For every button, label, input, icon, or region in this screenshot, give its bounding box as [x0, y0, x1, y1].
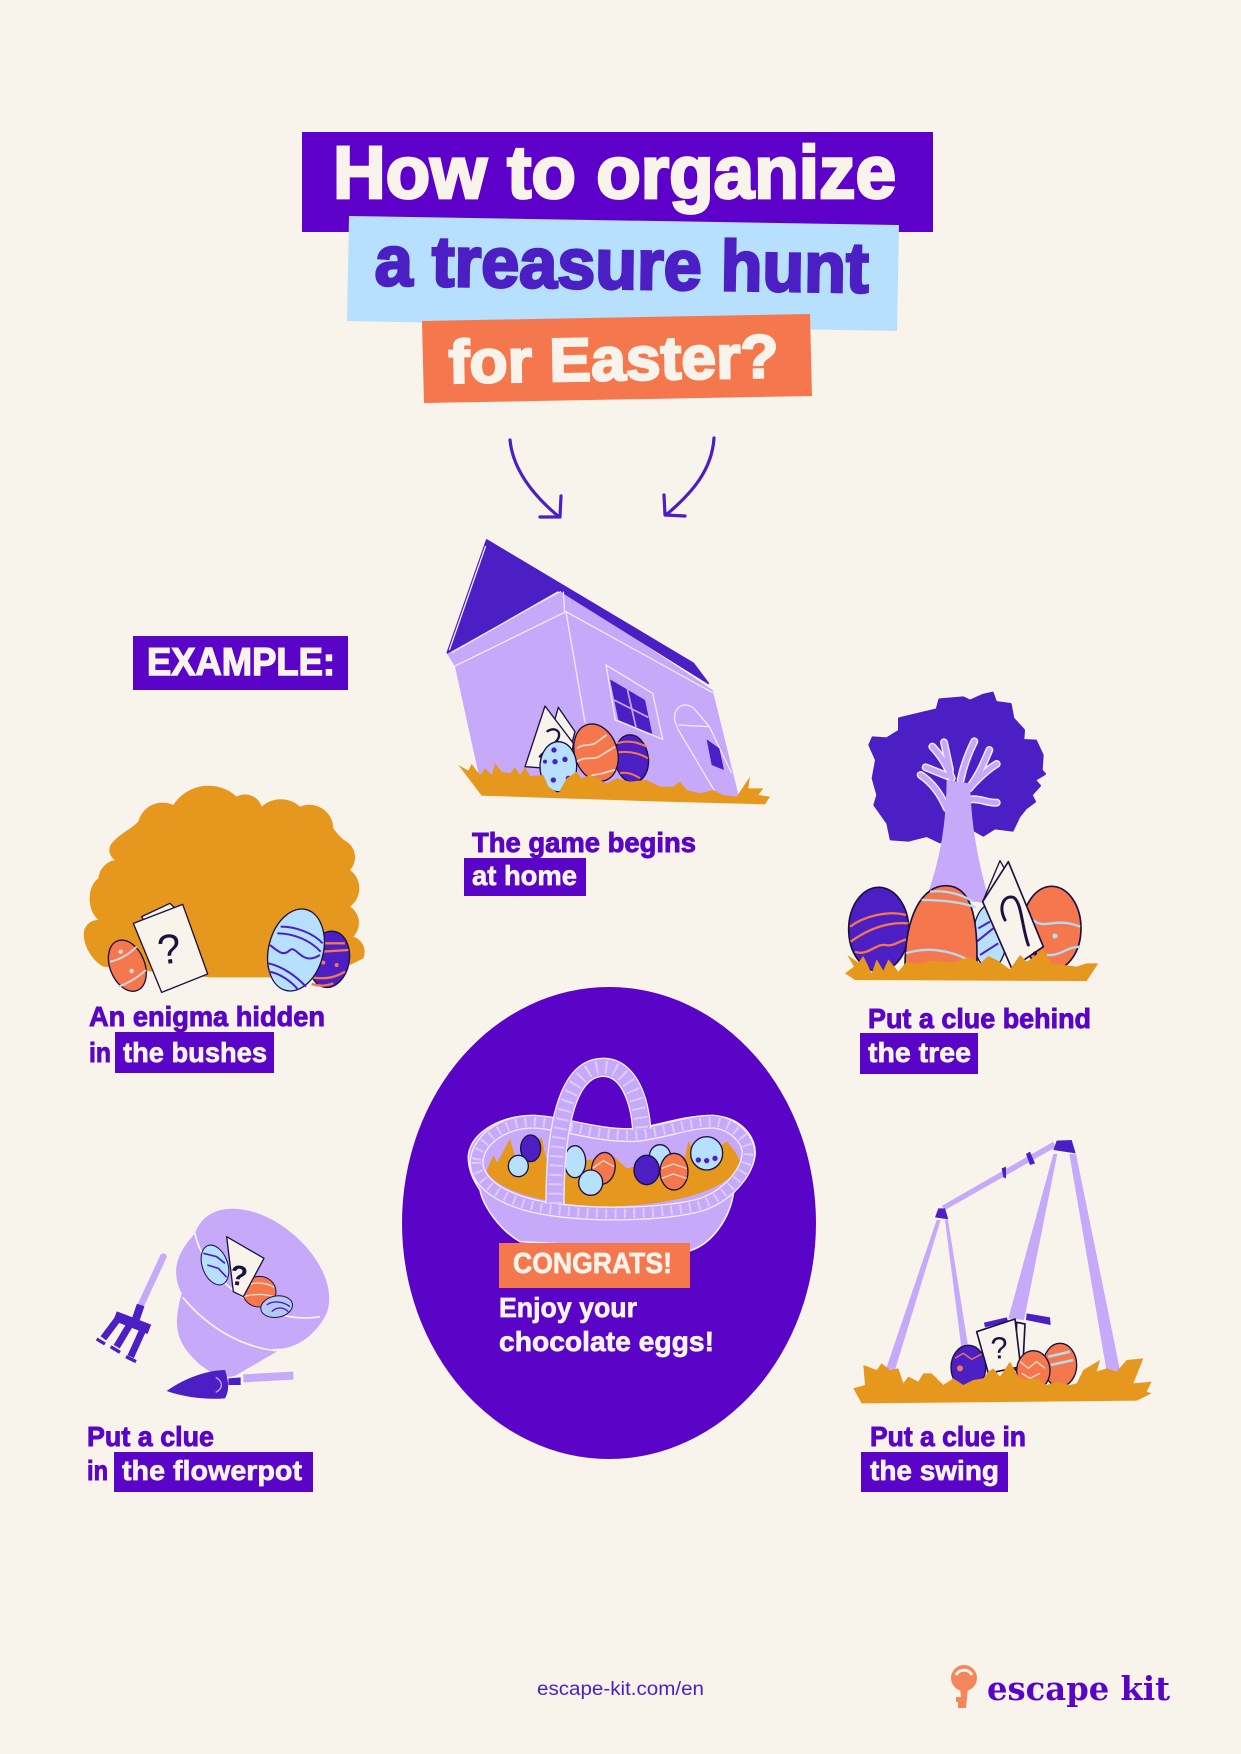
label: put a clue in the flowerpot: in [87, 1455, 108, 1486]
clue card [525, 706, 575, 770]
panel: home [447, 540, 770, 896]
pot rim [176, 1209, 329, 1349]
title line 2 banner [347, 216, 899, 331]
congrats message: Enjoy your [499, 1292, 637, 1323]
logo: escape kit [951, 1665, 1171, 1708]
egg: purple [612, 733, 652, 785]
label: put a clue behind the tree: Put a clue behind [868, 1003, 1091, 1034]
website url: escape-kit.com/en [537, 1679, 704, 1700]
house roof [447, 540, 708, 683]
illustration: basket [468, 1067, 755, 1251]
label: game begins at home [464, 827, 696, 896]
title line 1 text: How to organize [333, 131, 896, 214]
title line 1 banner [302, 132, 933, 232]
title line 3 banner [422, 314, 812, 403]
egg: left orange [101, 934, 153, 997]
egg: small blue [973, 905, 1007, 968]
egg: orange middle [905, 886, 977, 973]
basket interior grass [485, 1127, 744, 1207]
illustration: flowerpot and tools [97, 1209, 329, 1399]
illustration: bush with eggs and clue [84, 786, 365, 997]
congrats tag [499, 1243, 690, 1288]
congrats message [499, 1292, 714, 1357]
house wall lines [449, 546, 732, 792]
illustration: house [447, 540, 770, 804]
clue card [977, 1319, 1025, 1373]
label: an enigma hidden in the bushes [89, 1001, 325, 1073]
clue card: ? [990, 1331, 1009, 1366]
congrats message: chocolate eggs! [499, 1326, 714, 1357]
illustration: swing with eggs and clue [853, 1140, 1152, 1403]
label: an enigma hidden in the bushes: An enigma hidden [89, 1001, 325, 1032]
grass [458, 763, 770, 804]
icon: key [951, 1665, 977, 1708]
pot lines [183, 1233, 320, 1351]
panel: flowerpot [87, 1209, 329, 1492]
logo wordmark: escape kit [987, 1669, 1171, 1708]
basket rim rope [477, 1122, 748, 1214]
swing joints [935, 1140, 1076, 1327]
clue card: ? [154, 924, 184, 974]
label: put a clue behind the tree [860, 1003, 1091, 1074]
egg: purple [849, 887, 909, 971]
tree foliage [869, 693, 1045, 842]
bush [84, 786, 365, 977]
egg: orange right [1022, 886, 1081, 970]
label: put a clue in the flowerpot: Put a clue [87, 1421, 214, 1452]
house body [447, 591, 739, 798]
basket body [468, 1116, 755, 1251]
egg: orange back [1043, 1343, 1077, 1387]
title line 3 text: for Easter? [448, 322, 779, 396]
hand fork [97, 1257, 163, 1362]
grass [845, 949, 1098, 981]
eggs and clue in pot [196, 1237, 294, 1320]
swing frame [886, 1142, 1121, 1373]
panel: swing [853, 1140, 1152, 1492]
eggs in basket [508, 1135, 723, 1195]
example tag: EXAMPLE: [147, 641, 335, 684]
egg: orange [567, 718, 625, 787]
label: put a clue in the flowerpot [87, 1421, 313, 1492]
panel: congrats circle [402, 987, 816, 1459]
clue card [983, 861, 1043, 968]
egg: big blue [259, 903, 333, 997]
egg: purple [305, 928, 354, 991]
label: an enigma hidden in the bushes: the bushes [123, 1037, 267, 1068]
clue card [133, 903, 208, 992]
panel: tree [845, 693, 1098, 1074]
tree trunk and branches [921, 741, 997, 903]
egg: purple [951, 1345, 986, 1389]
label: an enigma hidden in the bushes: in [89, 1037, 111, 1068]
label: put a clue in the swing [861, 1421, 1026, 1492]
grass [853, 1358, 1152, 1403]
house window [610, 679, 724, 770]
purple circle [402, 987, 816, 1459]
arrow: left [510, 440, 561, 517]
arrow: right [664, 438, 714, 516]
egg: orange front [1017, 1351, 1050, 1391]
label: put a clue behind the tree: the tree [868, 1037, 971, 1068]
label: put a clue in the swing: Put a clue in [870, 1421, 1026, 1452]
basket handle [555, 1067, 642, 1204]
panel: bushes [84, 786, 365, 1073]
title [302, 131, 933, 403]
label: game begins at home: The game begins [472, 827, 696, 858]
pot base [177, 1293, 277, 1377]
label: put a clue in the swing: the swing [870, 1455, 999, 1486]
title line 2 text: a treasure hunt [374, 222, 869, 308]
label: put a clue in the flowerpot: the flowerpot [122, 1455, 302, 1486]
illustration: tree with eggs and clue [845, 693, 1098, 981]
label: game begins at home: at home [472, 860, 577, 891]
eggs and clue in pot: ? [228, 1259, 250, 1293]
egg: blue [540, 742, 577, 792]
congrats tag: CONGRATS! [513, 1248, 672, 1280]
trowel [167, 1370, 293, 1399]
